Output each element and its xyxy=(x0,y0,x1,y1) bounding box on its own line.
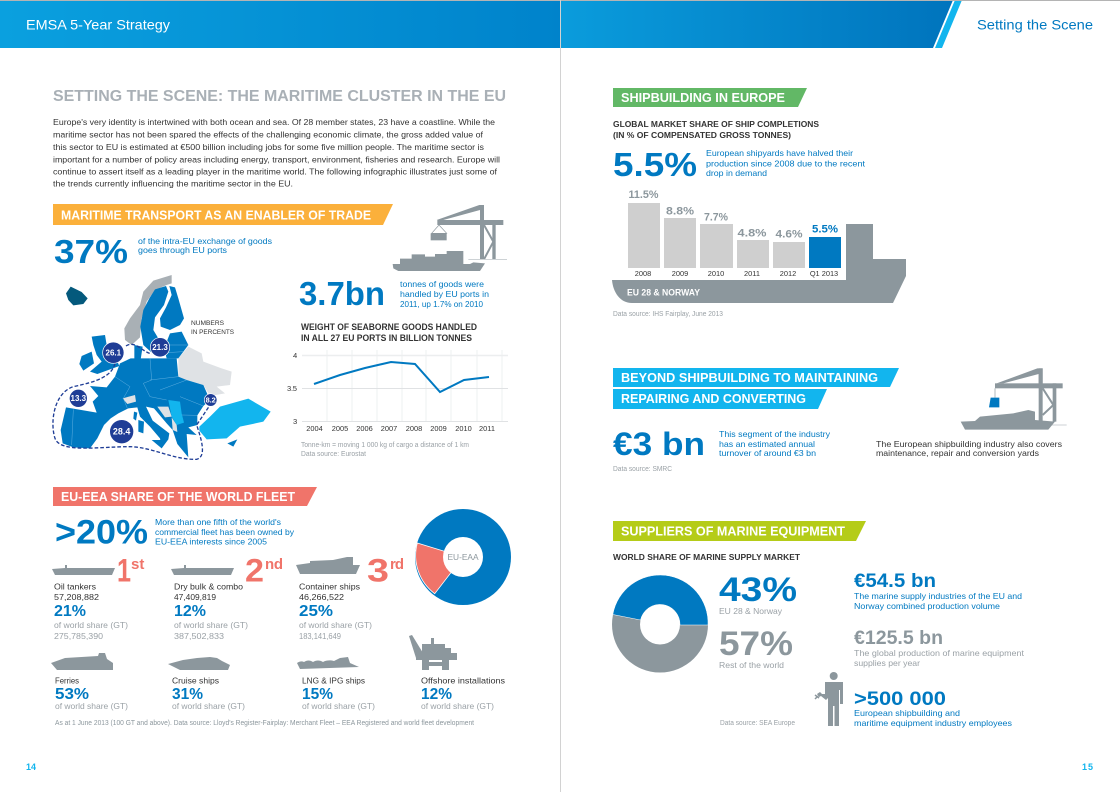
chart title: seaborne goods: IN ALL 27 EU PORTS IN BILLION TONNES xyxy=(301,333,472,343)
icon: worker with wrench xyxy=(815,672,843,726)
stat: 57% rest of world: 57% xyxy=(719,625,793,663)
fleet item: offshore installations: of world share (GT) xyxy=(421,701,494,711)
data source: IHS Fairplay: Data source: IHS Fairplay, June 2013 xyxy=(613,311,723,318)
donut chart: EU-EAA share: EU-EAA xyxy=(448,552,479,562)
stat: 5.5%: production since 2008 due to the recent xyxy=(706,158,866,168)
fleet item: offshore installations: Offshore installations xyxy=(421,676,505,686)
intro paragraph: maritime sector has not been spared the effects of the challenging economic climate, the gross added value of xyxy=(53,130,484,140)
fleet item: cruise ships: Cruise ships xyxy=(172,676,219,686)
fleet item: offshore installations: 12% xyxy=(421,686,452,703)
map note: IN PERCENTS xyxy=(191,329,235,336)
stat: 43% EU share: 43% xyxy=(719,571,797,609)
stat: 37% xyxy=(54,233,272,270)
stat: 54.5 billion euro: The marine supply industries of the EU and xyxy=(854,591,1022,601)
intro paragraph xyxy=(53,117,500,189)
heading banner: suppliers xyxy=(613,521,866,541)
stat: 5.5% xyxy=(613,146,866,183)
stat: 3.7bn: 3.7bn xyxy=(299,275,385,312)
line chart: seaborne goods: 2005 xyxy=(332,424,348,433)
fleet item: LNG and IPG ships: LNG & IPG ships xyxy=(302,676,365,686)
map of Europe: 8.2 xyxy=(206,396,216,405)
header bar: left page: EMSA 5-Year Strategy xyxy=(26,16,170,32)
chart title: marine supply market: WORLD SHARE OF MARINE SUPPLY MARKET xyxy=(613,552,801,562)
bar chart: ship completions: 7.7% xyxy=(704,212,728,224)
panel: shipbuilding in Europe xyxy=(612,88,906,318)
stat: 125.5 billion euro xyxy=(854,627,1025,668)
data source: SEA Europe: Data source: SEA Europe xyxy=(720,720,795,727)
fleet item: dry bulk and combo: nd xyxy=(265,556,283,573)
stat: 54.5 billion euro: Norway combined production volume xyxy=(854,601,1000,611)
fleet item: dry bulk and combo: 12% xyxy=(174,603,206,620)
line chart: seaborne goods xyxy=(287,350,508,433)
stat: 37%: 37% xyxy=(54,233,128,270)
fleet item: oil tankers: of world share (GT) xyxy=(54,620,128,630)
heading banner: repairing xyxy=(613,389,827,409)
fleet item: oil tankers: 57,208,882 xyxy=(54,592,99,602)
stat: 3.7bn: handled by EU ports in xyxy=(400,289,489,299)
bar chart: ship completions: 2008 xyxy=(635,269,651,278)
stat: 43% EU share: EU 28 & Norway xyxy=(719,606,783,616)
bar chart: ship completions: 2010 xyxy=(708,269,724,278)
heading banner: maritime transport xyxy=(53,204,393,225)
intro paragraph: Europe's very identity is intertwined with both ocean and sea. Of 28 member states, 23 have a coastline. While the xyxy=(53,117,495,127)
fleet item: dry bulk and combo xyxy=(171,552,283,641)
chart note: Tonne-km = moving 1 000 kg of cargo a distance of 1 km xyxy=(301,442,469,449)
fleet item: container ships: Container ships xyxy=(299,582,360,592)
stat: >20%: More than one fifth of the world's xyxy=(155,517,281,527)
line chart: seaborne goods: 3.5 xyxy=(287,384,297,393)
map of Europe: 13.3 xyxy=(71,394,87,403)
stat: 125.5 billion euro: The global production of marine equipment xyxy=(854,648,1025,658)
fleet item: ferries: of world share (GT) xyxy=(55,701,128,711)
intro paragraph: continue to assert itself as a leading player in the maritime world. The following infographic illustrates just some of xyxy=(53,166,498,176)
illustration: ship hull xyxy=(612,224,906,303)
stat: 3.7bn: tonnes of goods were xyxy=(400,279,484,289)
map note: NUMBERS xyxy=(191,320,225,327)
fleet item: ferries: 53% xyxy=(55,686,89,703)
bar chart: ship completions: 4.8% xyxy=(738,228,767,240)
header bar: right page: Setting the Scene xyxy=(977,16,1093,32)
fleet item: dry bulk and combo: Dry bulk & combo xyxy=(174,582,243,592)
panel: maritime transport xyxy=(53,204,508,459)
fleet item: container ships: 3 xyxy=(367,552,389,588)
stat: >20%: commercial fleet has been owned by xyxy=(155,527,295,537)
stat: >20% xyxy=(55,514,295,552)
bar chart: ship completions: Q1 2013 xyxy=(810,269,838,278)
map of Europe: 28.4 xyxy=(113,427,130,437)
stat: 3.7bn: 2011, up 1.7% on 2010 xyxy=(400,299,483,309)
stat: 500 000 employees: >500 000 xyxy=(854,688,946,710)
heading banner: shipbuilding xyxy=(613,88,807,107)
page number 14: 14 xyxy=(26,762,36,772)
fleet item: container ships xyxy=(296,552,404,641)
stat: 3 billion euro: This segment of the industry xyxy=(719,429,831,439)
icon: crane and ship in repair xyxy=(961,368,1067,430)
stat: 37%: goes through EU ports xyxy=(138,245,227,255)
stat: 37%: of the intra-EU exchange of goods xyxy=(138,236,272,246)
heading banner: maintaining: BEYOND SHIPBUILDING TO MAINTAINING xyxy=(621,370,878,385)
map of Europe: 21.3 xyxy=(152,343,168,352)
heading banner: world fleet: EU-EEA SHARE OF THE WORLD FLEET xyxy=(61,489,295,504)
header bar: left page xyxy=(0,0,560,48)
stat: 54.5 billion euro xyxy=(854,570,1022,611)
fleet item: LNG and IPG ships: of world share (GT) xyxy=(302,701,375,711)
heading banner: shipbuilding: SHIPBUILDING IN EUROPE xyxy=(621,90,785,105)
fleet item: oil tankers: Oil tankers xyxy=(54,582,96,592)
chart note: Data source: Eurostat xyxy=(301,451,366,458)
line chart: seaborne goods: 3 xyxy=(293,417,297,426)
line chart: seaborne goods: 2009 xyxy=(430,424,447,433)
note: repair yards xyxy=(876,439,1062,458)
intro paragraph: the trends currently influencing the maritime sector in the EU. xyxy=(53,179,293,189)
line chart: seaborne goods: 2010 xyxy=(455,424,472,433)
map of Europe xyxy=(53,275,271,459)
panel: beyond shipbuilding xyxy=(613,368,1067,473)
chart title: ship completions xyxy=(613,119,819,140)
bar chart: ship completions: 5.5% xyxy=(812,224,838,236)
donut chart: EU-EAA share xyxy=(415,509,511,605)
stat: 500 000 employees xyxy=(854,688,1012,728)
chart title: seaborne goods: WEIGHT OF SEABORNE GOODS HANDLED xyxy=(301,322,477,332)
fleet item: container ships: 25% xyxy=(299,603,333,620)
panel: suppliers of marine equipment xyxy=(612,521,1025,728)
stat: >20%: EU-EEA interests since 2005 xyxy=(155,536,267,546)
map note xyxy=(191,320,235,336)
page number 15: 15 xyxy=(1082,762,1093,772)
fleet item: dry bulk and combo: of world share (GT) xyxy=(174,620,248,630)
stat: 57% rest of world: Rest of the world xyxy=(719,660,784,670)
stat: 3 billion euro: has an estimated annual xyxy=(719,439,815,449)
line chart: seaborne goods: 2011 xyxy=(479,424,495,433)
line chart: seaborne goods: 4 xyxy=(293,351,297,360)
fleet item: oil tankers xyxy=(52,552,144,641)
header bar: right page xyxy=(560,0,1093,48)
stat: 3 billion euro: turnover of around €3 bn xyxy=(719,448,816,458)
note: repair yards: maintenance, repair and conversion yards xyxy=(876,448,1039,458)
stat: 125.5 billion euro: supplies per year xyxy=(854,658,920,668)
heading banner: repairing: REPAIRING AND CONVERTING xyxy=(621,391,806,406)
chart title: ship completions: (IN % OF COMPENSATED GROSS TONNES) xyxy=(613,130,791,140)
fleet item: oil tankers: 275,785,390 xyxy=(54,631,103,641)
page title: SETTING THE SCENE: THE MARITIME CLUSTER IN THE EU xyxy=(53,88,506,105)
stat: 5.5%: European shipyards have halved their xyxy=(706,148,853,158)
stat: 3 billion euro xyxy=(613,426,831,462)
bar chart: ship completions: 8.8% xyxy=(666,206,694,218)
stat: 5.5%: drop in demand xyxy=(706,168,767,178)
fleet item: container ships: 46,266,522 xyxy=(299,592,344,602)
bar chart: ship completions: 2011 xyxy=(744,269,760,278)
bar chart: ship completions: 2012 xyxy=(780,269,796,278)
fleet item: ferries: Ferries xyxy=(55,676,79,686)
intro paragraph: important for a number of policy areas including energy, transport, environment, fisheries and research. Europe will xyxy=(53,154,500,164)
fleet item: container ships: of world share (GT) xyxy=(299,620,372,630)
fleet item: dry bulk and combo: 47,409,819 xyxy=(174,592,216,602)
stat: 125.5 billion euro: €125.5 bn xyxy=(854,627,943,649)
bar chart: ship completions: 4.6% xyxy=(776,228,803,240)
fleet item: LNG and IPG ships: 15% xyxy=(302,686,333,703)
bar chart: ship completions: 2009 xyxy=(672,269,688,278)
line chart: seaborne goods: 2004 xyxy=(306,424,323,433)
fleet item: oil tankers: 1 xyxy=(117,552,131,588)
heading banner: suppliers: SUPPLIERS OF MARINE EQUIPMENT xyxy=(621,524,845,538)
fleet item: cruise ships xyxy=(168,657,245,711)
fleet item: offshore installations xyxy=(409,635,505,711)
chart note xyxy=(301,442,469,458)
fleet item: container ships: rd xyxy=(390,556,404,573)
stat: 3 billion euro: €3 bn xyxy=(613,426,705,462)
fleet item: dry bulk and combo: 2 xyxy=(245,552,264,588)
stat: 500 000 employees: European shipbuilding and xyxy=(854,708,960,718)
fleet item: ferries xyxy=(51,653,128,711)
line chart: seaborne goods: 2008 xyxy=(406,424,422,433)
country border lines xyxy=(72,345,203,445)
note: repair yards: The European shipbuilding industry also covers xyxy=(876,439,1062,449)
map of Europe: 26.1 xyxy=(106,348,122,357)
stat: >20%: >20% xyxy=(55,514,148,552)
stat: 3.7bn xyxy=(299,275,489,312)
panel: EU-EEA world fleet xyxy=(51,487,511,727)
stat: 5.5%: 5.5% xyxy=(613,146,697,183)
donut chart: marine supply market xyxy=(612,575,708,672)
chart title: seaborne goods xyxy=(301,322,477,343)
bar chart: ship completions: 11.5% xyxy=(628,189,659,201)
fleet item: oil tankers: st xyxy=(131,556,144,573)
bar chart: ship completions xyxy=(628,189,841,278)
footnote: fleet data source: As at 1 June 2013 (100 GT and above). Data source: Lloyd's Register-Fairplay: Merchant Fleet – EEA Registered and world fleet development xyxy=(55,720,474,727)
fleet item: dry bulk and combo: 387,502,833 xyxy=(174,631,224,641)
line chart: seaborne goods: 2006 xyxy=(356,424,373,433)
stat: 54.5 billion euro: €54.5 bn xyxy=(854,570,936,592)
stat: 500 000 employees: maritime equipment industry employees xyxy=(854,718,1012,728)
fleet item: LNG and IPG ships xyxy=(297,657,375,711)
heading banner: maritime transport: MARITIME TRANSPORT AS AN ENABLER OF TRADE xyxy=(61,208,371,222)
intro paragraph: this sector to EU is estimated at €500 billion including jobs for some five million people. The maritime sector is xyxy=(53,142,484,152)
data source: SMRC: Data source: SMRC xyxy=(613,466,672,473)
line chart: seaborne goods: 2007 xyxy=(381,424,397,433)
icon: crane and cargo ship xyxy=(393,205,507,271)
fleet item: cruise ships: of world share (GT) xyxy=(172,701,245,711)
fleet item: cruise ships: 31% xyxy=(172,686,203,703)
fleet item: container ships: 183,141,649 xyxy=(299,631,341,641)
illustration: ship hull: EU 28 & NORWAY xyxy=(627,288,700,298)
chart title: ship completions: GLOBAL MARKET SHARE OF SHIP COMPLETIONS xyxy=(613,119,819,129)
fleet item: oil tankers: 21% xyxy=(54,603,86,620)
